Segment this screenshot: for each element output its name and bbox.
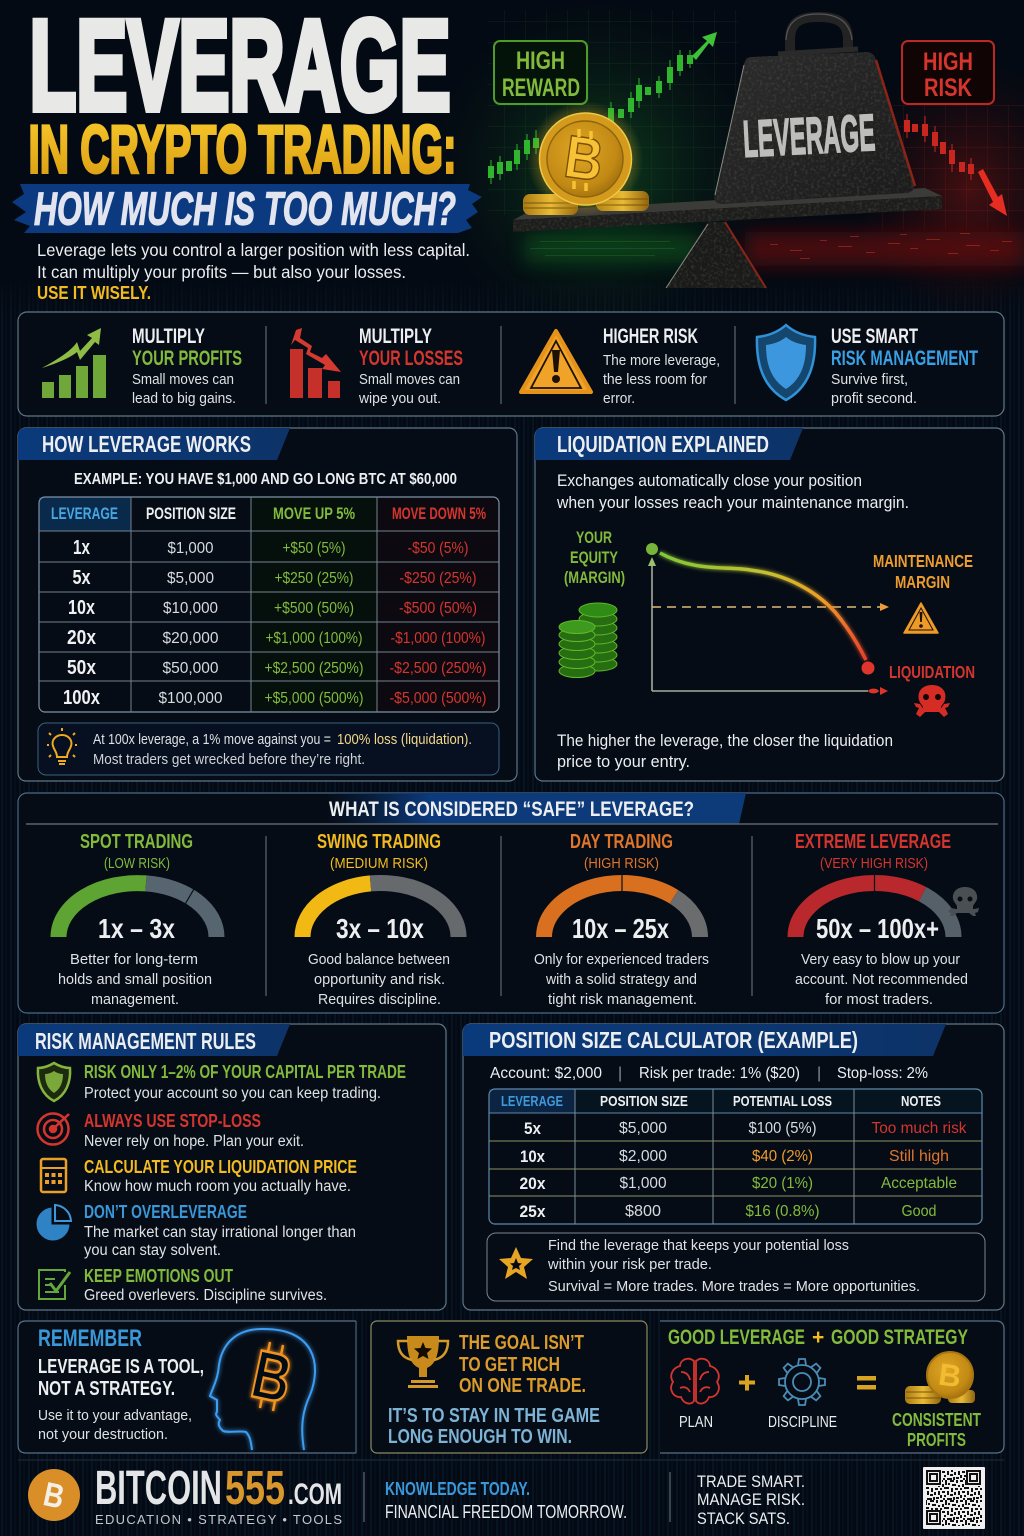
label: consistent profits: CONSISTENT — [892, 1410, 981, 1430]
column: swing trading: (MEDIUM RISK) — [330, 855, 428, 872]
icon: shield — [38, 1063, 70, 1101]
calculator table — [489, 1089, 982, 1224]
table rows: +$50 (5%) — [282, 540, 346, 557]
table rows: $20,000 — [162, 630, 219, 647]
table header: LEVERAGE — [501, 1093, 563, 1110]
heading: RISK MANAGEMENT RULES — [35, 1028, 256, 1054]
table header: POTENTIAL LOSS — [733, 1093, 832, 1110]
gold coin stacks — [523, 191, 649, 215]
text: callout: Survival = More trades. More trades = More opportunities. — [548, 1279, 920, 1295]
rule: liquidation price — [41, 1157, 357, 1195]
table rows: +$2,500 (250%) — [264, 660, 364, 677]
column: day trading — [534, 831, 709, 1008]
text: callout: Most traders get wrecked before they’re right. — [93, 752, 365, 768]
water reflection — [525, 232, 1024, 266]
label: maintenance margin — [873, 551, 973, 592]
heading: POSITION SIZE CALCULATOR (EXAMPLE) — [489, 1027, 858, 1053]
slogan — [385, 1479, 627, 1522]
table rows: -$1,000 (100%) — [390, 630, 486, 647]
column: extreme leverage: (VERY HIGH RISK) — [820, 855, 928, 872]
high risk label: RISK — [924, 74, 972, 102]
equals sign — [857, 1376, 876, 1390]
column: day trading: DAY TRADING — [570, 831, 673, 853]
column: spot trading: SPOT TRADING — [80, 831, 193, 853]
text: remember: NOT A STRATEGY. — [38, 1378, 175, 1400]
rule: stop-loss — [38, 1111, 304, 1150]
equation heading — [668, 1326, 968, 1349]
label: maintenance margin: MARGIN — [895, 572, 950, 592]
account parameters: | — [618, 1065, 622, 1082]
table rows: 5x — [72, 567, 90, 589]
column: day trading: (HIGH RISK) — [584, 855, 659, 872]
panel: the goal — [371, 1321, 647, 1453]
description: Requires discipline. — [318, 992, 441, 1008]
column: swing trading — [302, 831, 458, 1008]
intro text: Leverage lets you control a larger position with less capital. — [37, 240, 470, 260]
heading: LIQUIDATION EXPLAINED — [557, 431, 769, 457]
table rows: +$500 (50%) — [274, 600, 354, 617]
table rows: 20x — [520, 1174, 546, 1193]
text: the goal: THE GOAL ISN’T — [459, 1332, 584, 1354]
gauge: high risk — [544, 875, 700, 937]
labels: plan and discipline — [679, 1414, 837, 1431]
text: the goal: ON ONE TRADE. — [459, 1375, 586, 1397]
table rows — [520, 1119, 967, 1221]
icon: light bulb — [47, 728, 77, 764]
hero illustration: leverage scale — [430, 0, 1024, 340]
green rising candlesticks and arrow — [488, 32, 717, 184]
table header — [51, 504, 486, 523]
equation heading: GOOD STRATEGY — [831, 1326, 968, 1349]
motto: TRADE SMART. — [697, 1472, 805, 1491]
icon: coin stack — [905, 1352, 975, 1404]
rule: don't overleverage: DON’T OVERLEVERAGE — [84, 1202, 247, 1222]
text: multiply profits — [132, 325, 242, 407]
slogan: KNOWLEDGE TODAY. — [385, 1479, 530, 1499]
panel: liquidation explained — [535, 428, 1004, 781]
heading — [26, 793, 998, 824]
title: in crypto trading: IN CRYPTO TRADING: — [28, 112, 456, 188]
table rows: $20 (1%) — [752, 1175, 813, 1192]
closing text: price to your entry. — [557, 753, 690, 771]
text: remember — [38, 1325, 204, 1443]
text: callout — [93, 732, 472, 768]
label: your equity: YOUR — [576, 528, 612, 547]
rule: keep emotions out: KEEP EMOTIONS OUT — [84, 1266, 233, 1286]
subtitle banner: HOW MUCH IS TOO MUCH? — [34, 182, 456, 234]
rule: keep emotions out: Greed overlevers. Discipline survives. — [84, 1287, 327, 1304]
icon: gear — [779, 1359, 825, 1405]
heading: WHAT IS CONSIDERED “SAFE” LEVERAGE? — [329, 798, 694, 821]
value: 10x – 25x — [572, 913, 669, 944]
text: risk management: USE SMART — [831, 325, 918, 348]
description: Only for experienced traders — [534, 952, 709, 968]
table rows: Too much risk — [872, 1120, 967, 1137]
chart: equity decline curve — [646, 543, 889, 695]
column: swing trading: SWING TRADING — [317, 831, 441, 853]
table header: POSITION SIZE — [600, 1093, 688, 1110]
description — [795, 952, 968, 1008]
description: Better for long-term — [70, 952, 198, 968]
brand name: .COM — [288, 1478, 342, 1511]
text: higher risk — [603, 325, 720, 407]
text: remember: Use it to your advantage, — [38, 1408, 192, 1424]
table header: POSITION SIZE — [146, 504, 236, 523]
description: Very easy to blow up your — [801, 952, 960, 968]
text: multiply profits: YOUR PROFITS — [132, 347, 242, 370]
table rows: 50x — [67, 657, 96, 679]
description: Good balance between — [308, 952, 450, 968]
text: callout: within your risk per trade. — [547, 1257, 712, 1273]
intro text — [556, 472, 909, 512]
text: multiply profits: lead to big gains. — [132, 391, 236, 407]
label: your equity: EQUITY — [570, 548, 618, 567]
brand name: 555 — [225, 1462, 285, 1515]
high reward label: REWARD — [502, 74, 580, 102]
high reward label: HIGH — [516, 47, 565, 75]
brand tagline: EDUCATION • STRATEGY • TOOLS — [95, 1512, 342, 1527]
text: callout: Find the leverage that keeps your potential loss — [548, 1238, 849, 1254]
table rows: $800 — [625, 1203, 661, 1220]
account parameters: | — [817, 1065, 821, 1082]
icon: star — [499, 1247, 533, 1279]
description — [58, 952, 212, 1008]
value: 1x – 3x — [98, 913, 175, 944]
text: higher risk: The more leverage, — [603, 353, 720, 369]
text: remember: LEVERAGE IS A TOOL, — [38, 1356, 204, 1378]
labels: plan and discipline: PLAN — [679, 1414, 713, 1431]
slogan: FINANCIAL FREEDOM TOMORROW. — [385, 1502, 627, 1522]
label: liquidation: LIQUIDATION — [889, 662, 975, 682]
rule: keep emotions out — [39, 1266, 327, 1304]
bitcoin coin: B — [560, 123, 607, 194]
description — [308, 952, 450, 1008]
table rows: 10x — [520, 1147, 545, 1166]
text: multiply losses — [358, 325, 463, 407]
table rows: $10,000 — [163, 600, 218, 617]
table header — [501, 1093, 941, 1110]
icon: loss bars — [290, 328, 341, 398]
text: multiply losses: YOUR LOSSES — [359, 347, 463, 370]
rule: don't overleverage — [36, 1202, 356, 1259]
rule: don't overleverage: you can stay solvent. — [84, 1242, 221, 1259]
table rows: $50,000 — [162, 660, 219, 677]
panel: position size calculator — [463, 1024, 1004, 1310]
table rows: Good — [902, 1203, 936, 1220]
icon: warning — [521, 331, 591, 392]
high risk label: HIGH — [923, 48, 973, 76]
label: consistent profits: PROFITS — [907, 1430, 966, 1450]
gauge: medium risk — [302, 883, 458, 937]
intro text: Exchanges automatically close your position — [557, 472, 862, 490]
table rows: 25x — [520, 1202, 546, 1221]
qr code — [923, 1467, 985, 1529]
footer — [28, 1462, 985, 1529]
text: the goal — [459, 1332, 586, 1397]
table rows: +$1,000 (100%) — [266, 630, 362, 647]
panel: good strategy equation — [660, 1321, 1004, 1453]
table header: MOVE DOWN 5% — [392, 504, 486, 523]
table rows: -$500 (50%) — [399, 600, 477, 617]
description: tight risk management. — [548, 992, 697, 1008]
logo: bitcoin coin: B — [40, 1475, 68, 1517]
kettlebell handle — [778, 14, 858, 54]
text: higher risk: error. — [603, 391, 635, 407]
labels: plan and discipline: DISCIPLINE — [768, 1414, 837, 1431]
rule: stop-loss: ALWAYS USE STOP-LOSS — [84, 1111, 261, 1131]
description: for most traders. — [825, 992, 933, 1008]
icon: warning triangle — [904, 603, 938, 633]
motto: MANAGE RISK. — [697, 1490, 805, 1509]
table rows: 100x — [63, 687, 100, 709]
icon: head with bitcoin — [210, 1329, 315, 1450]
heading — [535, 428, 803, 460]
text: stay in the game — [388, 1405, 600, 1448]
description: with a solid strategy and — [545, 972, 697, 988]
green market grid — [430, 0, 770, 340]
callout: liquidation warning — [38, 723, 499, 775]
panel: risk management rules — [18, 1024, 446, 1310]
value: 50x – 100x+ — [816, 913, 939, 944]
text: callout: At 100x leverage, a 1% move against you = — [93, 732, 331, 748]
motto: STACK SATS. — [697, 1509, 790, 1528]
column: extreme leverage — [795, 831, 979, 1008]
plus sign — [739, 1375, 755, 1390]
label: your equity — [564, 528, 625, 587]
icon: head with bitcoin: B — [245, 1336, 298, 1418]
text: callout — [547, 1238, 920, 1295]
icon: checklist — [39, 1270, 70, 1299]
table header: NOTES — [901, 1093, 941, 1110]
text: risk management: profit second. — [831, 391, 917, 407]
account parameters — [490, 1065, 928, 1082]
icon: calculator — [41, 1159, 66, 1192]
description: management. — [91, 992, 179, 1008]
icon: target — [38, 1114, 69, 1144]
fulcrum — [666, 222, 766, 288]
icon: brain — [671, 1359, 719, 1404]
text: risk management — [831, 325, 978, 407]
table rows: $100 (5%) — [748, 1120, 816, 1137]
table rows: $1,000 — [168, 540, 214, 557]
closing text — [557, 732, 893, 771]
text: remember: not your destruction. — [38, 1427, 168, 1443]
table rows: Acceptable — [881, 1175, 957, 1192]
panel: safe leverage — [18, 793, 1004, 1013]
account parameters: Risk per trade: 1% ($20) — [639, 1065, 800, 1082]
table rows: $40 (2%) — [752, 1148, 813, 1165]
equation heading: + — [812, 1326, 824, 1349]
text: multiply profits: MULTIPLY — [132, 325, 205, 348]
motto — [697, 1472, 805, 1528]
value: 3x – 10x — [336, 913, 424, 944]
red market grid — [855, 60, 1024, 320]
table rows: $5,000 — [167, 570, 214, 587]
heading — [18, 1024, 290, 1056]
table rows: Still high — [889, 1148, 949, 1165]
table header: LEVERAGE — [51, 504, 118, 523]
column: extreme leverage: EXTREME LEVERAGE — [795, 831, 951, 853]
text: higher risk: HIGHER RISK — [603, 325, 698, 348]
seesaw beam — [513, 188, 942, 232]
table rows: -$2,500 (250%) — [390, 660, 486, 677]
column: spot trading — [58, 831, 216, 1008]
intro text: when your losses reach your maintenance margin. — [556, 494, 909, 512]
table header: MOVE UP 5% — [273, 504, 355, 523]
label: your equity: (MARGIN) — [564, 568, 625, 587]
icon: shield — [757, 325, 815, 400]
high risk label — [902, 41, 994, 104]
example text: EXAMPLE: YOU HAVE $1,000 AND GO LONG BTC AT $60,000 — [74, 471, 457, 488]
table rows: 1x — [73, 537, 90, 559]
text: stay in the game: IT’S TO STAY IN THE GAME — [388, 1405, 600, 1427]
label: consistent profits — [892, 1410, 981, 1450]
gauge: low risk — [58, 883, 216, 937]
heading — [18, 428, 290, 460]
table rows: 5x — [524, 1119, 541, 1138]
table rows: +$5,000 (500%) — [264, 690, 364, 707]
logo: bitcoin coin — [28, 1469, 80, 1521]
closing text: The higher the leverage, the closer the liquidation — [557, 732, 893, 750]
text: multiply losses: MULTIPLY — [359, 325, 432, 348]
icon: green coin stacks — [559, 603, 617, 678]
account parameters: Account: $2,000 — [490, 1065, 602, 1082]
hero illustration: leverage scale: LEVERAGE — [742, 104, 876, 169]
rule: liquidation price: CALCULATE YOUR LIQUIDATION PRICE — [84, 1157, 357, 1177]
table rows: 20x — [67, 627, 96, 649]
rule: risk only 1-2% — [38, 1062, 406, 1102]
table rows: -$250 (25%) — [400, 570, 476, 587]
description: holds and small position — [58, 972, 212, 988]
table rows: -$5,000 (500%) — [390, 690, 486, 707]
panel: how leverage works — [18, 428, 517, 781]
icon: red skull — [914, 685, 950, 717]
icon: profit bars — [42, 328, 106, 398]
rule: stop-loss: Never rely on hope. Plan your exit. — [84, 1133, 304, 1150]
brand name: BITCOIN — [95, 1462, 222, 1515]
table rows: 10x — [68, 597, 95, 619]
text: higher risk: the less room for — [603, 372, 707, 388]
text: callout: 100% loss (liquidation). — [337, 732, 472, 748]
description — [534, 952, 709, 1008]
table rows: -$50 (5%) — [408, 540, 468, 557]
equation heading: GOOD LEVERAGE — [668, 1326, 805, 1349]
intro text: It can multiply your profits — but also your losses. — [37, 262, 406, 282]
table rows: $2,000 — [619, 1148, 667, 1165]
icon: pie chart — [36, 1205, 71, 1241]
rule: don't overleverage: The market can stay irrational longer than — [84, 1224, 356, 1241]
panel: remember — [18, 1321, 356, 1453]
bitcoin coin — [527, 101, 643, 217]
table rows: $5,000 — [619, 1120, 667, 1137]
weight body — [715, 52, 915, 204]
icon: trophy — [398, 1336, 448, 1388]
text: stay in the game: LONG ENOUGH TO WIN. — [388, 1426, 572, 1448]
intro text: USE IT WISELY. — [37, 283, 151, 303]
panel: key effects — [18, 312, 1004, 416]
text: risk management: Survive first, — [831, 372, 908, 388]
text: remember: REMEMBER — [38, 1325, 142, 1352]
intro text — [37, 240, 470, 303]
label: maintenance margin: MAINTENANCE — [873, 551, 973, 571]
description: opportunity and risk. — [314, 972, 445, 988]
rule: liquidation price: Know how much room you actually have. — [84, 1178, 351, 1195]
gauge: very high risk — [796, 875, 954, 937]
table rows — [63, 537, 486, 709]
heading: HOW LEVERAGE WORKS — [42, 431, 251, 457]
high reward label — [494, 41, 587, 104]
account parameters: Stop-loss: 2% — [837, 1065, 928, 1082]
text: the goal: TO GET RICH — [459, 1354, 560, 1376]
column: spot trading: (LOW RISK) — [104, 855, 170, 872]
rule: risk only 1-2%: Protect your account so you can keep trading. — [84, 1085, 381, 1102]
text: multiply losses: Small moves can — [359, 372, 460, 388]
table rows: $100,000 — [158, 690, 223, 707]
table rows: +$250 (25%) — [274, 570, 354, 587]
icon: coin stack: B — [936, 1357, 963, 1394]
callout: survival — [487, 1233, 985, 1301]
rule: risk only 1-2%: RISK ONLY 1–2% OF YOUR CAPITAL PER TRADE — [84, 1062, 406, 1082]
text: multiply profits: Small moves can — [132, 372, 234, 388]
red falling candlesticks and arrow — [904, 114, 1007, 216]
leverage table — [39, 497, 499, 712]
description: account. Not recommended — [795, 972, 968, 988]
icon: grey skull — [948, 887, 979, 916]
text: multiply losses: wipe you out. — [358, 391, 441, 407]
table rows: $16 (0.8%) — [746, 1203, 820, 1220]
table rows: $1,000 — [620, 1175, 667, 1192]
